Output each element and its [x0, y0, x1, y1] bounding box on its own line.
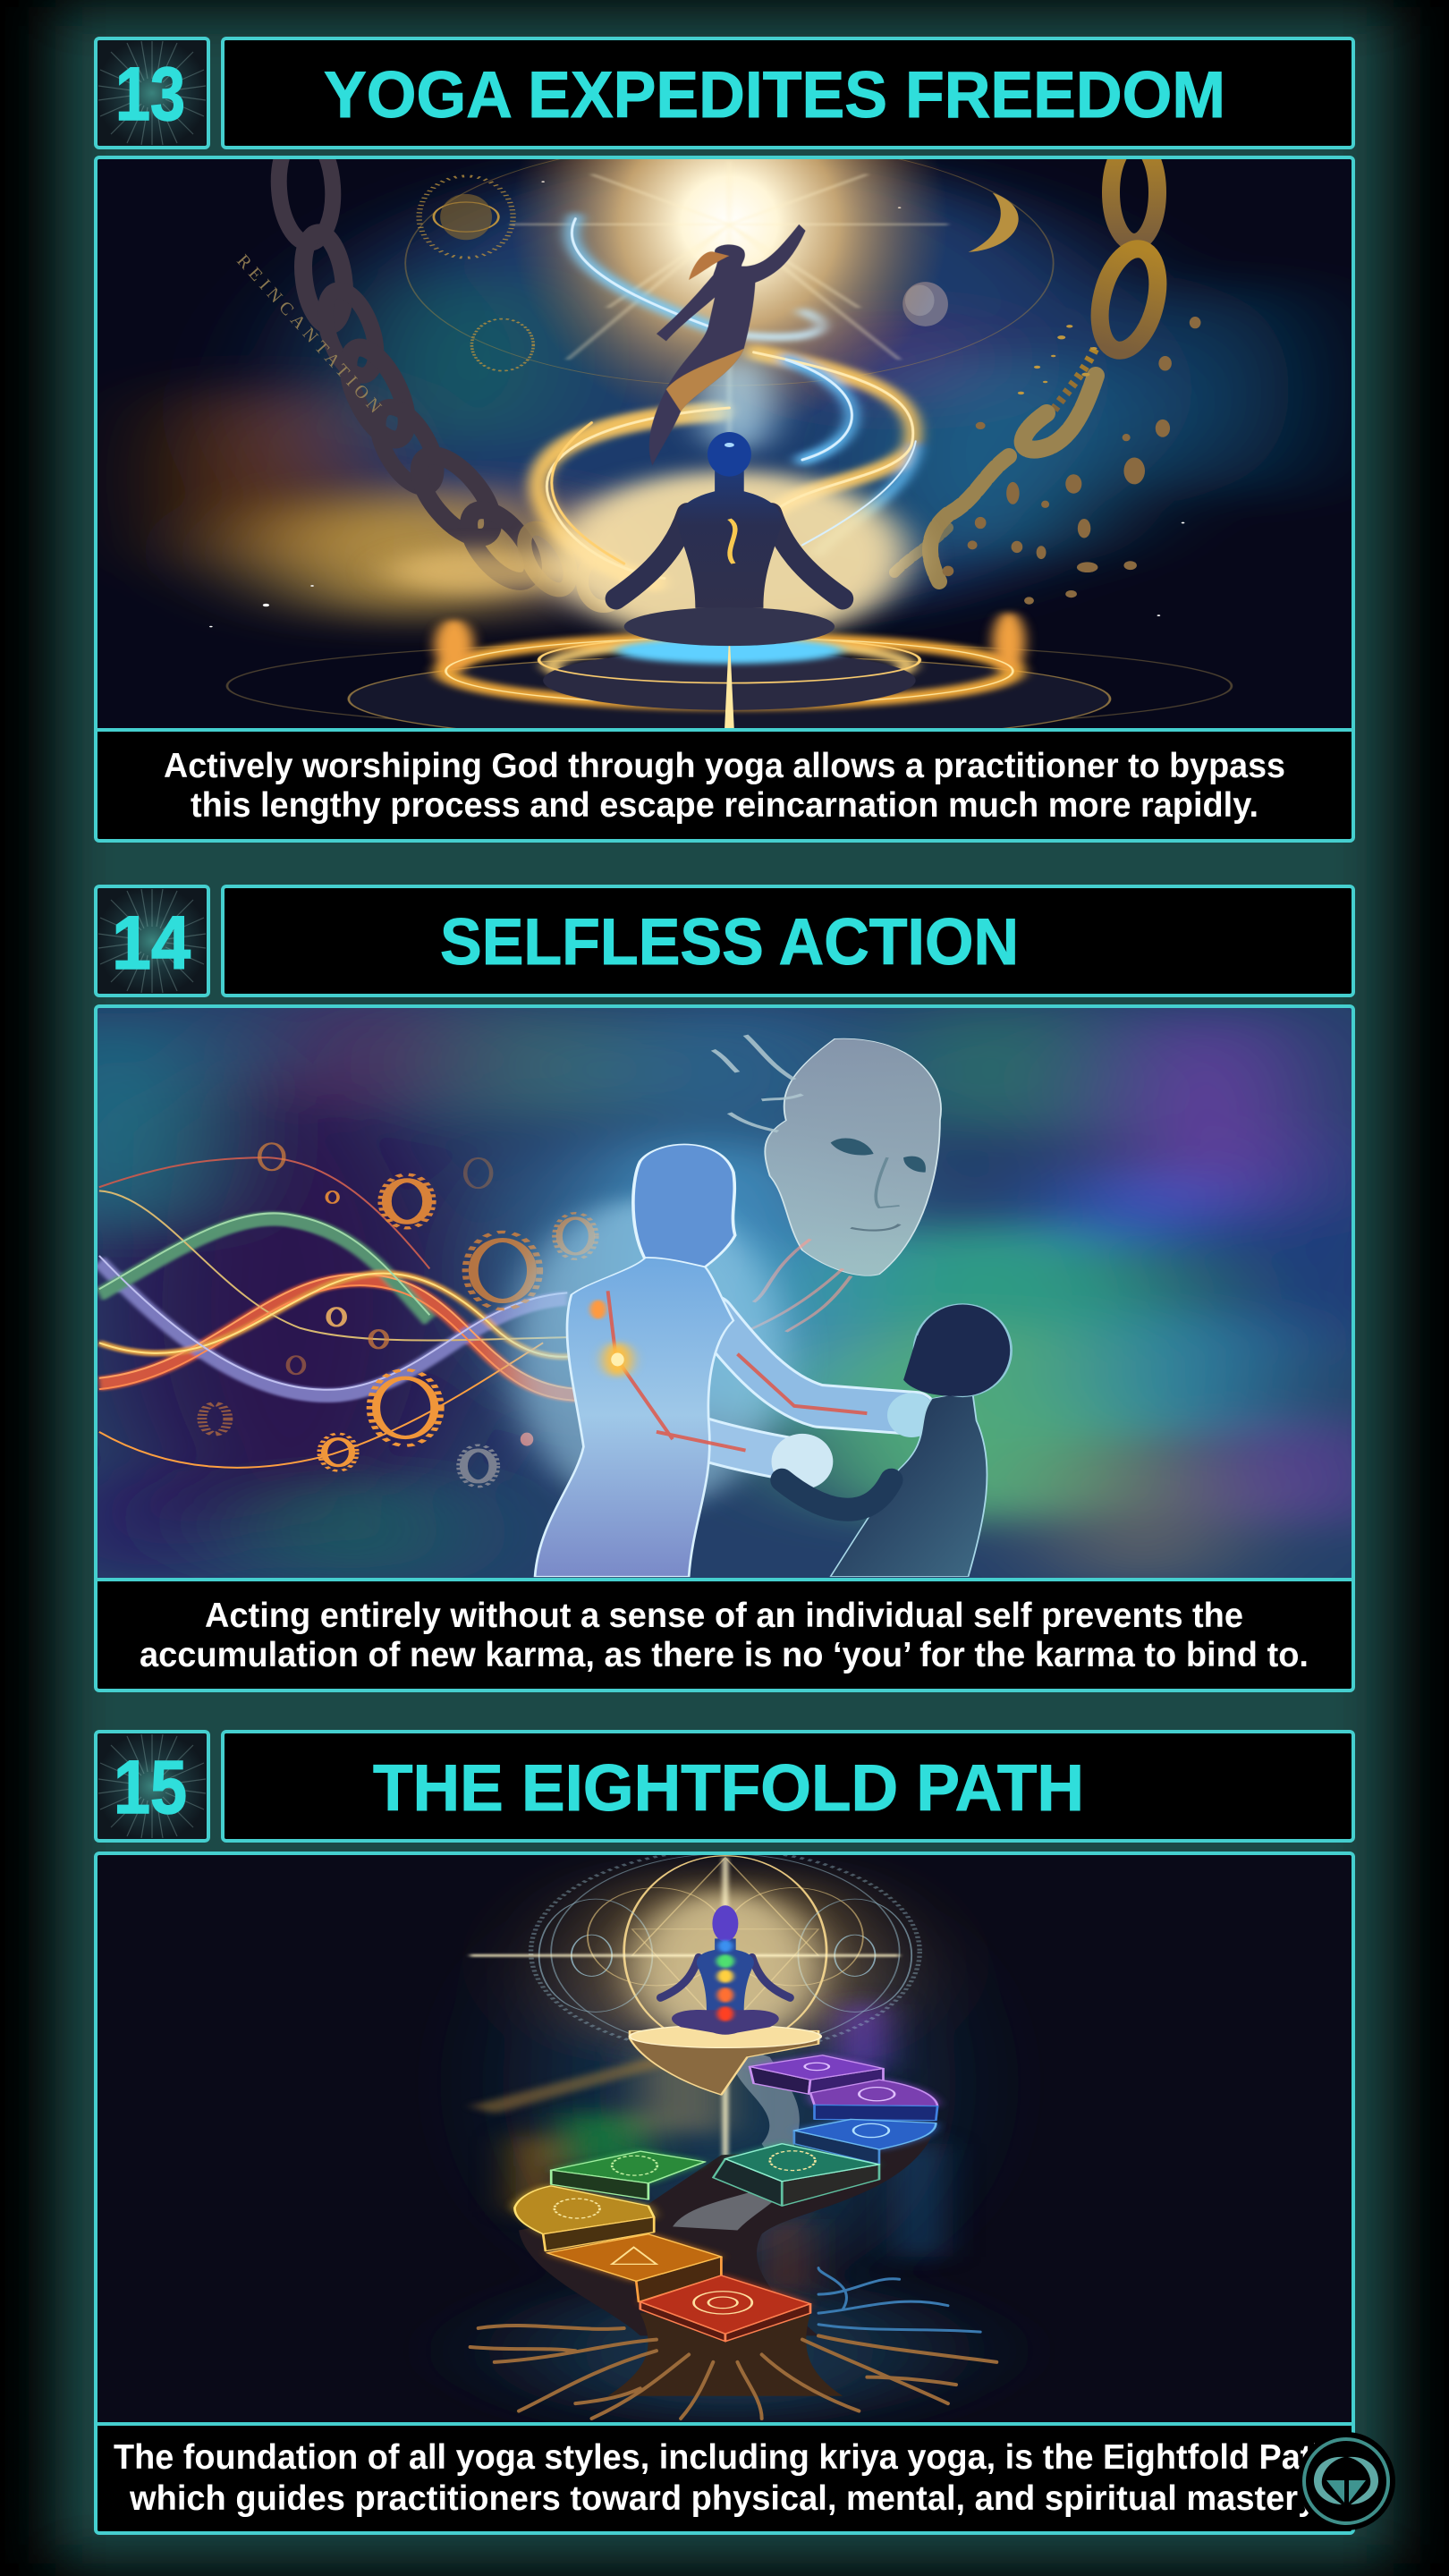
- number badge 14: [96, 886, 208, 996]
- sacred geometry: [531, 1850, 919, 2054]
- frame 14: [96, 1006, 1353, 1690]
- number badge 13: 13: [115, 52, 185, 136]
- aurora background: [57, 987, 1361, 1591]
- section 13: yoga expedites freedom: [96, 15, 1353, 841]
- nebula background: [203, 159, 1280, 619]
- caption bar 15: [96, 2424, 1353, 2533]
- dissolving mask: [713, 1035, 941, 1335]
- colour light streaks: [514, 2004, 940, 2294]
- title bar 13: [223, 38, 1353, 148]
- title bar 14: [223, 886, 1353, 996]
- trunk and roots: [470, 2046, 996, 2419]
- caption bar 13: Actively worshiping God through yoga allows a practitioner to bypass: [164, 747, 1285, 785]
- number badge 13: [96, 38, 208, 148]
- number badge 15: [96, 1732, 208, 1841]
- illustration: figure helping another: [57, 987, 1361, 1591]
- title bar 13: YOGA EXPEDITES FREEDOM: [324, 59, 1225, 131]
- caption bar 14: Acting entirely without a sense of an individual self prevents the: [205, 1597, 1243, 1635]
- gears: [202, 1143, 597, 1487]
- caption bar 13: this lengthy process and escape reincarnation much more rapidly.: [191, 786, 1258, 825]
- caption bar 15: The foundation of all yoga styles, including kriya yoga, is the Eightfold Path,: [114, 2438, 1342, 2477]
- step symbols: [555, 2063, 894, 2314]
- central glow: [535, 1873, 924, 2419]
- caption bar 14: accumulation of new karma, as there is no ‘you’ for the karma to bind to.: [140, 1636, 1309, 1674]
- chain right crumbling: [1046, 142, 1167, 420]
- illustration: eight steps and tree: [96, 1850, 1353, 2424]
- frame 15: [96, 1853, 1353, 2533]
- glowing rings at base: [227, 612, 1232, 741]
- caption bar 14: [96, 1580, 1353, 1690]
- chain label: REINCANTATION: [233, 251, 386, 417]
- section 14: selfless action: [57, 886, 1361, 1690]
- meditating figure: [616, 432, 843, 646]
- flying debris: [209, 15, 1232, 741]
- chain left: [275, 131, 545, 592]
- section 15: the eightfold path: [96, 1732, 1353, 2533]
- illustration: meditator breaking chains: [97, 159, 1352, 728]
- step: top platform: [630, 2025, 821, 2095]
- kneeling dark figure: [782, 1304, 1012, 1576]
- energy waves: [99, 1219, 608, 1395]
- caption bar 15: which guides practitioners toward physical, mental, and spiritual mastery.: [129, 2479, 1324, 2518]
- number badge 15: 15: [114, 1745, 187, 1829]
- caption bar 13: [96, 730, 1353, 841]
- central helper figure: [511, 1144, 936, 1576]
- steps: [514, 2025, 937, 2342]
- chakra figure: [660, 1905, 790, 2035]
- sun glow: [511, 15, 948, 430]
- title bar 14: SELFLESS ACTION: [440, 906, 1019, 979]
- frame 13: [96, 157, 1353, 841]
- number badge 14: 14: [112, 901, 191, 985]
- celestial symbols: [405, 141, 1054, 386]
- ascending figure: [649, 225, 806, 465]
- title bar 15: [223, 1732, 1353, 1841]
- energy swirls: [538, 219, 916, 582]
- logo badge: [1297, 2432, 1395, 2530]
- step glow: [514, 2055, 937, 2334]
- title bar 15: THE EIGHTFOLD PATH: [373, 1752, 1084, 1825]
